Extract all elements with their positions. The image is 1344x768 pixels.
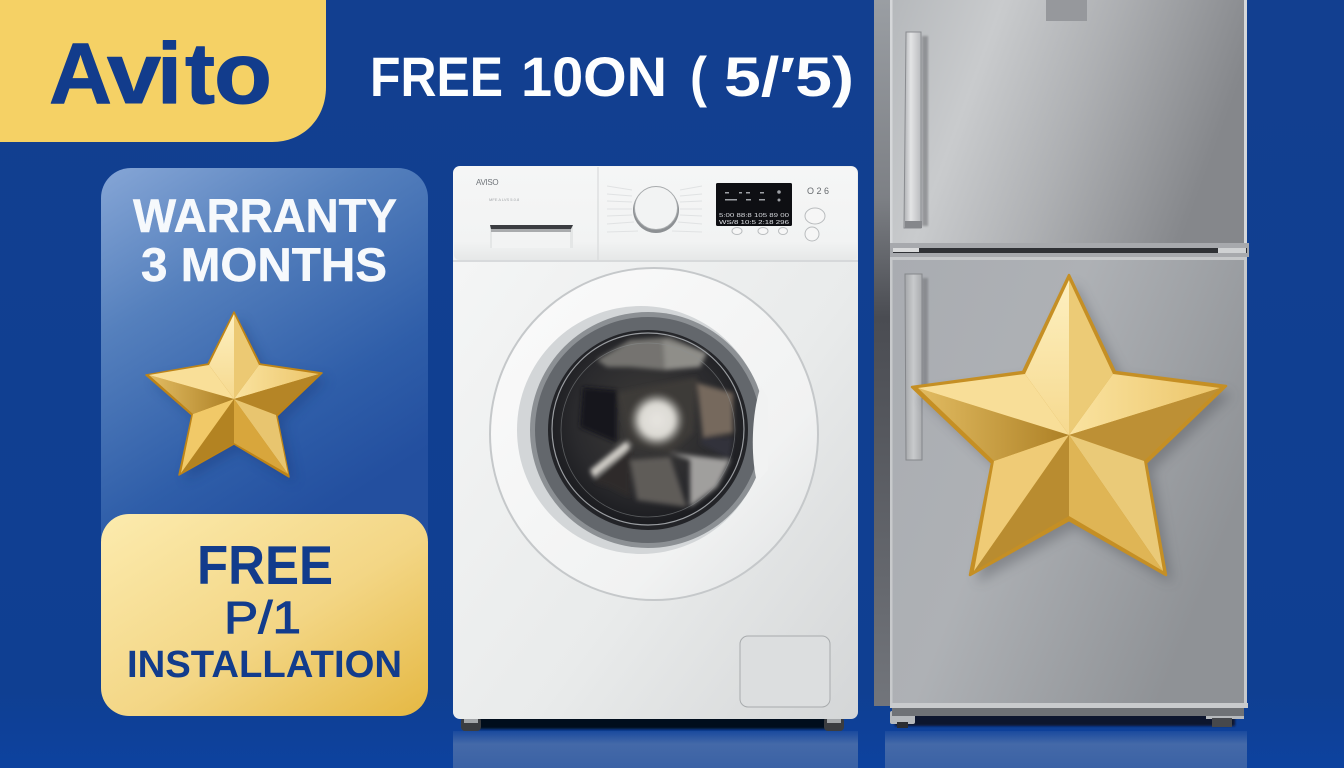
logo wordmark: v: [107, 26, 161, 122]
headline: [370, 45, 854, 108]
display: [716, 183, 792, 226]
fridge side: [874, 0, 890, 706]
headline: FREE: [370, 45, 503, 108]
detergent drawer: [490, 225, 573, 248]
upper door: [890, 0, 1247, 243]
door notch: [753, 386, 768, 482]
feet: [461, 714, 844, 731]
logo wordmark: o: [214, 26, 272, 122]
door hinge gap: [890, 243, 1249, 257]
top label plate: [1046, 0, 1087, 21]
headline: 5/′5): [724, 45, 854, 108]
icon: large gold star: [912, 275, 1232, 583]
icon: small gold star: [146, 312, 328, 483]
warranty heading: 3 MONTHS: [141, 238, 387, 291]
lower handle: [905, 274, 928, 460]
logo wordmark: A: [49, 26, 112, 122]
price label: P/1: [224, 592, 301, 643]
drum glass: [552, 333, 744, 525]
panel: free installation: [101, 514, 428, 716]
headline: 10ON: [521, 45, 667, 108]
door edge highlights lower: [890, 257, 1247, 706]
display: WS/8 10:5 2:18 296: [719, 220, 789, 226]
washing machine: [453, 166, 858, 731]
buttons: [732, 208, 825, 241]
display: 5:00 88:8 105 89 00: [719, 213, 789, 219]
warranty heading: WARRANTY: [133, 189, 397, 242]
panel icons: O 2 6: [807, 186, 829, 196]
logo wordmark: t: [185, 26, 215, 122]
door edge highlights: [890, 0, 1247, 243]
headline: (: [690, 45, 707, 108]
control panel: [453, 167, 858, 261]
panel: warranty: [101, 168, 428, 540]
fridge feet: [890, 711, 1244, 728]
lower door: [890, 257, 1247, 706]
logo wordmark: [49, 26, 272, 122]
installation label: INSTALLATION: [127, 644, 402, 686]
service hatch: [740, 636, 830, 707]
refrigerator: [874, 0, 1249, 728]
brand mark: AVISO: [476, 178, 498, 187]
floor reflections: [453, 731, 1247, 768]
door: [489, 267, 819, 601]
fridge base: [890, 703, 1248, 716]
upper handle: [904, 32, 928, 228]
dial: [633, 186, 679, 233]
logo badge: [0, 0, 326, 142]
washer body: [453, 166, 858, 719]
small model text: MFE A LVS 5.0.8: [489, 197, 520, 202]
logo wordmark: i: [157, 26, 182, 122]
free heading: FREE: [197, 534, 333, 596]
warranty heading: [133, 189, 397, 291]
program labels: [607, 186, 702, 232]
door inner ring: [517, 306, 765, 554]
